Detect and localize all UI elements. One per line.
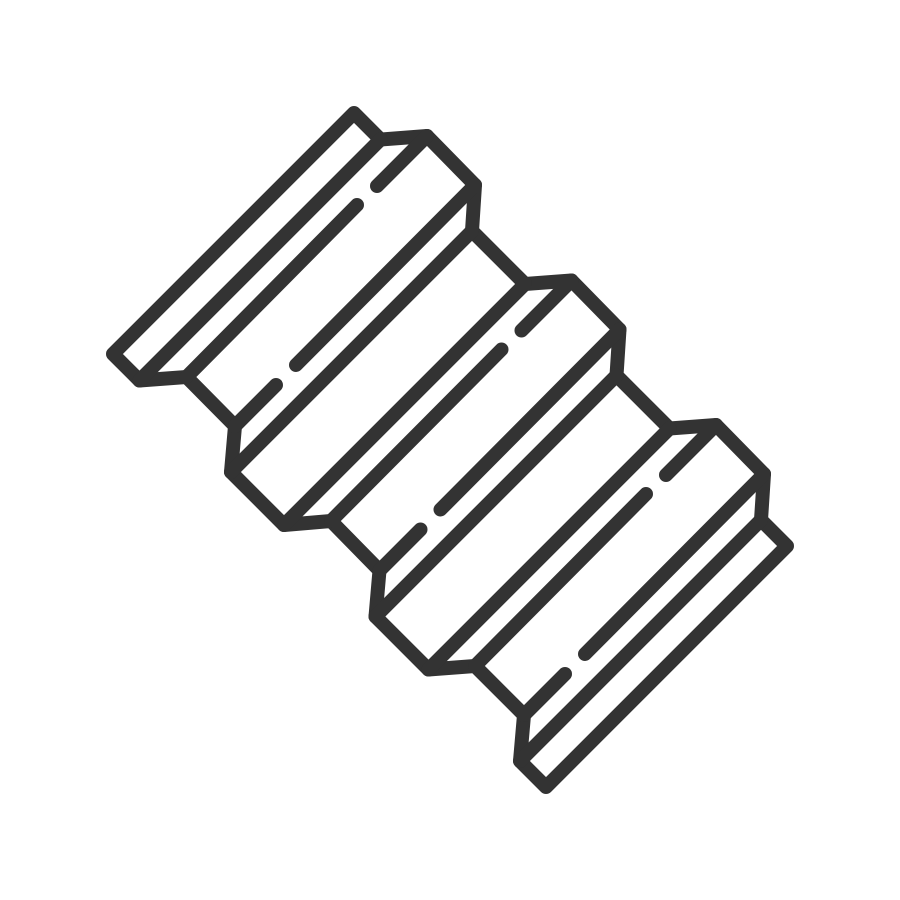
first ridge fold lines (140, 136, 475, 472)
outline of corrugated sheet (113, 113, 787, 787)
third ridge fold lines (428, 425, 764, 761)
second ridge fold lines (284, 280, 620, 616)
